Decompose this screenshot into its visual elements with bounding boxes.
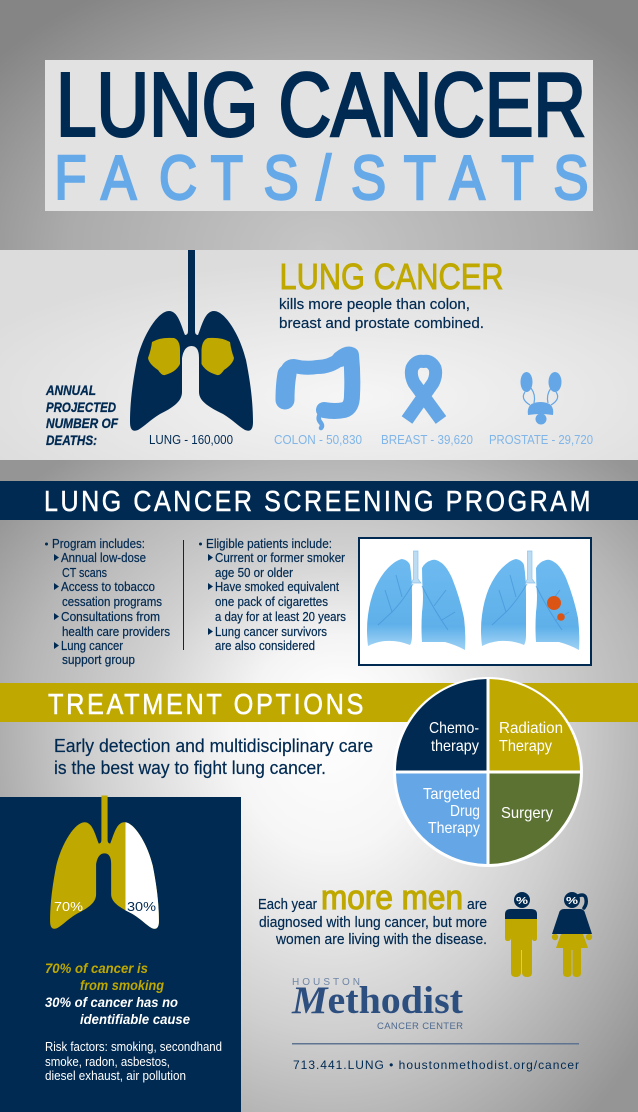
chart: treatment pie [393,677,583,867]
banner: treatment options: TREATMENT OPTIONS [48,689,366,721]
list: program includes: CT scans [62,566,107,580]
quadrant: surgery: Surgery [501,805,553,822]
icon: woman: % [566,895,579,907]
text: smoking statistics [45,960,190,1027]
illustration: lungs with tumors [481,551,579,650]
list: program includes [45,537,170,667]
text: risk factors [45,1040,222,1083]
list: eligible patients: a day for at least 20 years [215,610,346,624]
list: program includes: Access to tobacco [61,580,155,594]
label: annual projected number of deaths: PROJECTED [46,399,116,415]
text: early detection [54,736,373,778]
tumors [547,596,565,621]
label: annual projected number of deaths: NUMBER OF [46,415,118,431]
logo: houston methodist cancer center: HOUSTON [292,977,360,988]
text: smoking statistics: from smoking [80,977,164,993]
list: eligible patients: are also considered [215,639,315,653]
label: annual projected number of deaths [45,382,118,448]
icon: lungs 70/30: 70% [54,899,83,914]
logo: houston methodist cancer center: CANCER CENTER [377,1021,463,1032]
death count labels: PROSTATE - 29,720 [489,432,593,447]
text: smoking statistics: 30% of cancer has no [45,994,178,1010]
text: more men: Each year [258,897,317,913]
death count labels: COLON - 50,830 [274,432,362,447]
statement text: breast and prostate combined. [279,315,484,332]
label: annual projected number of deaths: DEATHS: [46,432,97,448]
text: more men: are [467,897,487,913]
quadrant: chemotherapy: therapy [431,738,479,755]
death count labels: LUNG - 160,000 [149,432,233,447]
icon: lungs [130,250,253,431]
icon: woman [552,892,592,977]
list: eligible patients: Current or former smoker [215,551,345,565]
list: eligible patients [199,537,346,653]
logo: houston methodist cancer center: Methodist [291,979,463,1022]
quadrant: targeted drug therapy: Therapy [428,820,480,837]
quadrant: surgery [490,774,580,864]
quadrant: targeted drug therapy [396,774,486,864]
quadrant: radiation therapy [490,679,580,770]
text: more men: more men [321,879,463,917]
text: early detection: is the best way to fight lung cancer. [54,758,326,778]
quadrant: chemotherapy [396,679,486,770]
statement text [279,296,484,332]
text: early detection: Early detection and multidisciplinary care [54,736,373,756]
death count labels: BREAST - 39,620 [381,432,473,447]
subtitle: facts / stats: FACTS/STATS [54,144,588,213]
icon: prostate [520,372,562,424]
text: risk factors: smoke, radon, asbestos, [45,1055,170,1069]
banner: treatment options [0,683,638,722]
list: eligible patients: Eligible patients include: [206,537,332,551]
text: more men: diagnosed with lung cancer, but more [259,915,487,931]
quadrant: chemotherapy: Chemo- [429,720,479,737]
heading: lung cancer: LUNG CANCER [280,256,504,297]
panel: causes [0,796,241,1112]
illustration: healthy lungs [367,551,465,650]
list: program includes: Consultations from [61,610,160,624]
list: program includes: Program includes: [52,537,145,551]
text: more men [258,879,487,948]
quadrant: targeted drug therapy: Targeted [423,786,480,803]
list: eligible patients: Lung cancer survivors [215,625,327,639]
icon: lungs 70/30 [50,796,159,929]
list: program includes: support group [62,653,135,667]
text: risk factors: diesel exhaust, air pollution [45,1069,186,1083]
list: eligible patients: Have smoked equivalent [215,580,339,594]
quadrant: targeted drug therapy: Drug [450,803,480,820]
text: more men: women are living with the disease. [275,932,487,948]
quadrant: radiation therapy: Therapy [499,738,552,755]
text: smoking statistics: identifiable cause [80,1011,190,1027]
icon: lungs 70/30: 30% [127,899,156,914]
quadrant: radiation therapy: Radiation [499,720,563,737]
icon: colon [285,354,352,428]
text: smoking statistics: 70% of cancer is [45,960,148,976]
list: program includes: cessation programs [62,595,162,609]
list: eligible patients: age 50 or older [215,566,293,580]
title block [45,56,593,213]
icon: awareness ribbon [407,361,441,420]
statement text: kills more people than colon, [279,296,470,313]
death count labels [149,432,593,447]
panel: annual deaths comparison [0,250,638,460]
label: annual projected number of deaths: ANNUAL [45,382,96,398]
icon: man [505,892,537,977]
icon: man: % [516,895,529,907]
contact line: 713.441.LUNG • houstonmethodist.org/cancer [293,1058,579,1072]
text: risk factors: Risk factors: smoking, secondhand [45,1040,222,1054]
list: program includes: Annual low-dose [61,551,146,565]
list: program includes: health care providers [62,625,170,639]
list: eligible patients: one pack of cigarettes [215,595,328,609]
list: program includes: Lung cancer [61,639,123,653]
panel: lung illustration [359,538,591,665]
